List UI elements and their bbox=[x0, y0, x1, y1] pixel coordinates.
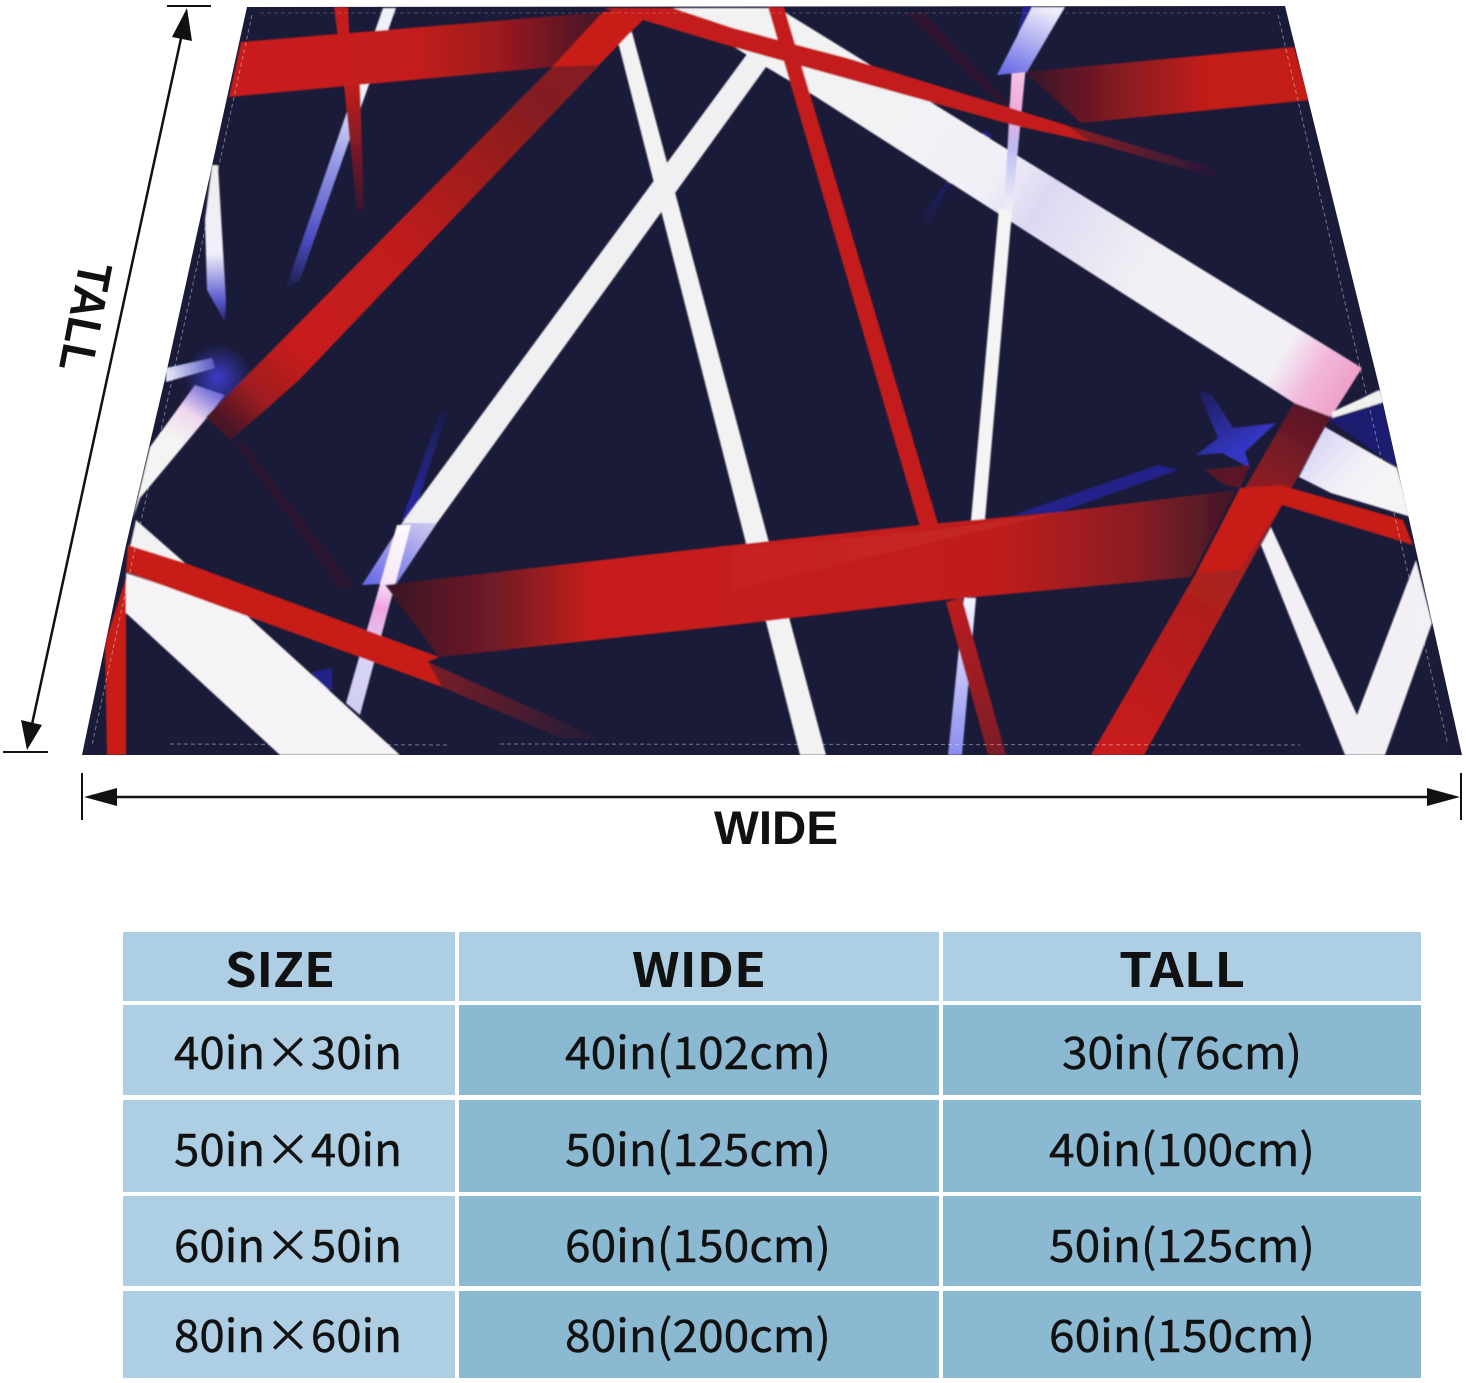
table header row bbox=[123, 932, 1421, 1001]
table row: 50in: 50in×40in bbox=[174, 1114, 402, 1179]
table row: 60in bbox=[123, 1196, 1421, 1286]
blanket illustration bbox=[82, 5, 1462, 755]
stitching bbox=[92, 13, 1448, 745]
size table bbox=[123, 932, 1421, 1378]
table row: 80in: 80in(200cm) bbox=[565, 1300, 831, 1365]
table row: 80in bbox=[123, 1291, 1421, 1378]
table row: 60in: 60in(150cm) bbox=[565, 1210, 831, 1275]
table row: 60in: 50in(125cm) bbox=[1049, 1210, 1315, 1275]
table row: 60in: 60in×50in bbox=[174, 1210, 402, 1275]
table row: 40in: 40in×30in bbox=[174, 1017, 402, 1082]
table row: 40in: 30in(76cm) bbox=[1062, 1017, 1302, 1082]
table row: 80in: 80in×60in bbox=[174, 1300, 402, 1365]
table header row: WIDE bbox=[632, 932, 766, 1001]
tall dimension arrow bbox=[3, 6, 211, 752]
table row: 50in bbox=[123, 1100, 1421, 1192]
table row: 50in: 50in(125cm) bbox=[565, 1114, 831, 1179]
table row: 80in: 60in(150cm) bbox=[1049, 1300, 1315, 1365]
table row: 40in bbox=[123, 1005, 1421, 1095]
tall label: TALL bbox=[48, 258, 121, 376]
table row: 50in: 40in(100cm) bbox=[1049, 1114, 1315, 1179]
wide label: WIDE bbox=[714, 801, 838, 854]
table row: 40in: 40in(102cm) bbox=[565, 1017, 831, 1082]
wide dimension arrow bbox=[82, 773, 1461, 820]
table header row: SIZE bbox=[225, 932, 335, 1001]
table header row: TALL bbox=[1119, 932, 1245, 1001]
